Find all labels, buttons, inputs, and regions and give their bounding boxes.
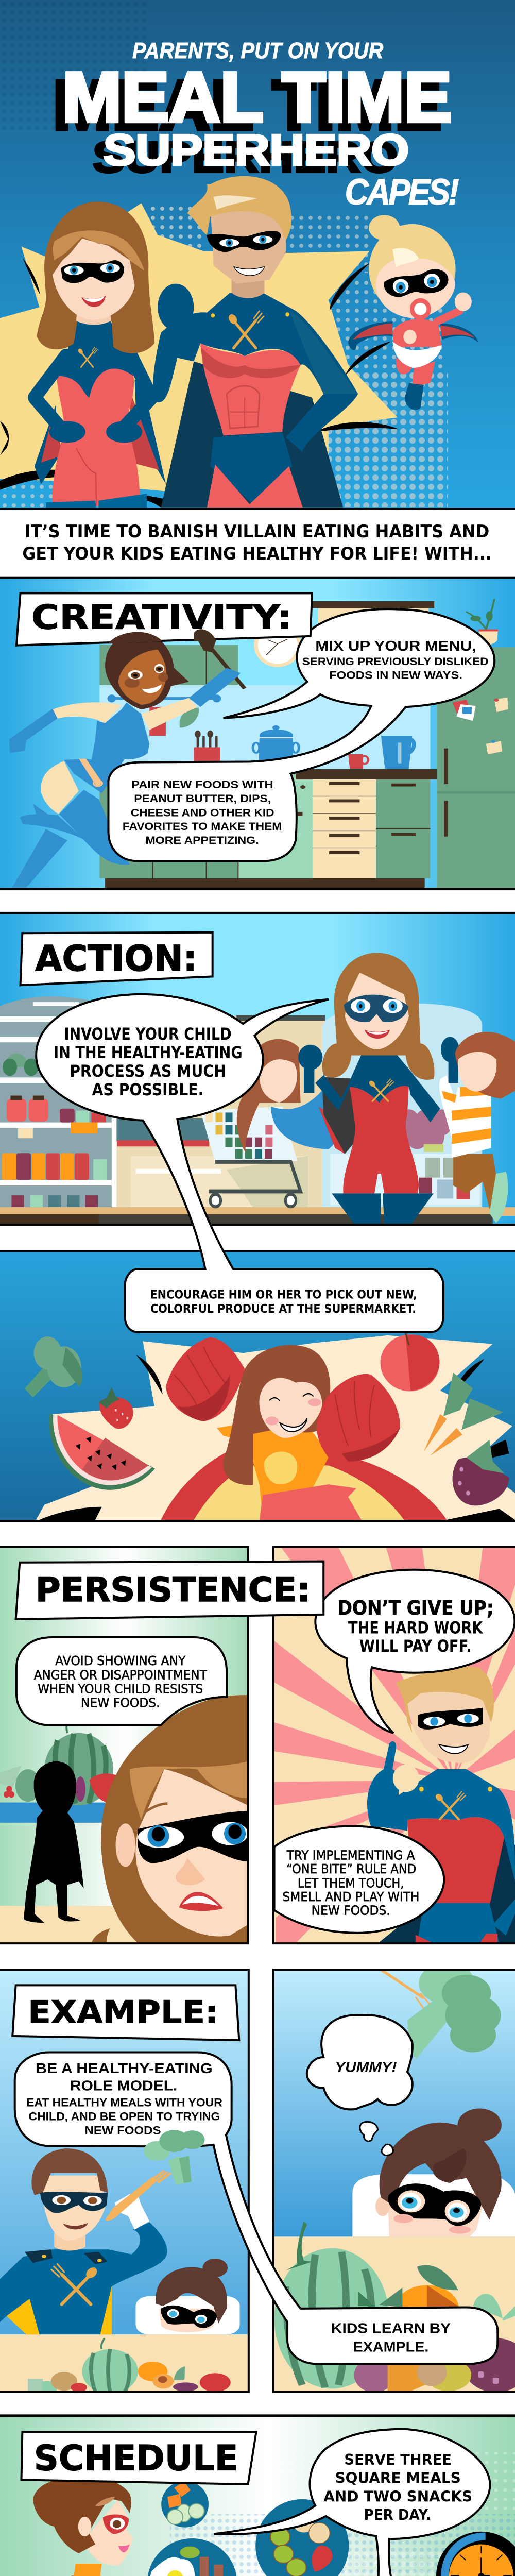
speech bubbles: role model and kids learn <box>15 2052 497 2364</box>
speech bubbles: CHEESE AND OTHER KID <box>131 806 274 819</box>
icon: watermelon slice <box>49 1413 155 1490</box>
character: boy <box>439 1032 515 1223</box>
character: schedule hero <box>0 2477 150 2576</box>
speech bubble: don't give up: WILL PAY OFF. <box>359 1637 472 1656</box>
speech bubble: avoid showing anger: WHEN YOUR CHILD RESISTS <box>38 1682 203 1697</box>
panel: schedule <box>0 2414 515 2576</box>
speech bubble: try one bite: LET THEM TOUCH, <box>298 1875 404 1891</box>
speech bubbles: PEANUT BUTTER, DIPS, <box>134 792 271 805</box>
panel: persistence <box>0 1547 515 1943</box>
speech bubbles: role model and kids learn: KIDS LEARN BY <box>331 2320 451 2336</box>
speech bubbles <box>214 2429 500 2576</box>
speech bubble: try one bite <box>274 1826 444 1933</box>
speech bubbles: MIX UP YOUR MENU, <box>315 638 476 654</box>
speech bubble: avoid showing anger <box>16 1637 227 1725</box>
heading: action <box>21 933 213 985</box>
plate: cucumber and cheese <box>161 2481 209 2528</box>
intro text: IT’S TIME TO BANISH VILLAIN EATING HABITS AND <box>25 521 489 542</box>
speech bubbles: SERVE THREE <box>344 2451 452 2468</box>
speech bubbles: role model and kids learn: BE A HEALTHY-EATING <box>36 2060 213 2076</box>
title <box>53 38 459 212</box>
comic burst <box>36 1335 515 1520</box>
speech bubbles: INVOLVE YOUR CHILD <box>64 1025 232 1043</box>
character: father with fork <box>0 2148 171 2334</box>
character: frustrated mother <box>92 1695 248 1943</box>
icon: broccoli <box>25 1336 82 1398</box>
speech bubbles: MORE APPETIZING. <box>146 834 259 846</box>
speech bubble: try one bite: SMELL AND PLAY WITH <box>283 1889 419 1904</box>
speech bubble: try one bite: “ONE BITE” RULE AND <box>286 1861 416 1876</box>
thought cloud: yummy <box>307 2015 413 2155</box>
icon: fruit on table <box>28 2338 231 2394</box>
speech bubbles: FOODS IN NEW WAYS. <box>329 669 462 681</box>
heading: example: EXAMPLE: <box>28 1994 218 2030</box>
plate: kiwi and strawberry <box>255 2499 349 2576</box>
character: girl with red fists <box>161 1337 447 1520</box>
intro text: GET YOUR KIDS EATING HEALTHY FOR LIFE! WITH... <box>22 544 492 564</box>
heading: creativity: CREATIVITY: <box>31 598 293 637</box>
character: kitchen hero <box>9 629 245 888</box>
supermarket shelves <box>0 996 117 1207</box>
speech bubbles: IN THE HEALTHY-EATING <box>54 1043 243 1062</box>
panel: action lower <box>0 1251 515 1520</box>
character: mother in red <box>315 953 440 1225</box>
character: girl in cape <box>237 1039 345 1154</box>
speech bubble: avoid showing anger: AVOID SHOWING ANY <box>55 1653 186 1668</box>
speech bubble: try one bite: NEW FOODS. <box>312 1903 390 1918</box>
speech bubbles: SQUARE MEALS <box>335 2470 461 2487</box>
speech bubbles: AS POSSIBLE. <box>92 1080 203 1099</box>
panel: example left <box>0 1970 249 2394</box>
icon: fridge notes <box>453 698 508 754</box>
speech bubbles: FAVORITES TO MAKE THEM <box>123 820 282 833</box>
speech bubbles: role model and kids learn: NEW FOODS <box>85 2125 161 2137</box>
heading: action: ACTION: <box>35 938 197 979</box>
speech bubbles: PAIR NEW FOODS WITH <box>131 778 273 791</box>
silhouette: child <box>24 1761 84 1923</box>
icon: pot <box>253 725 299 761</box>
speech bubbles: AND TWO SNACKS <box>323 2488 472 2505</box>
speech bubbles: role model and kids learn: ROLE MODEL. <box>70 2077 177 2094</box>
panel: example right <box>273 1962 515 2393</box>
character: daughter close-up <box>352 2109 515 2236</box>
speech bubbles: COLORFUL PRODUCE AT THE SUPERMARKET. <box>150 1301 416 1316</box>
icon: broccoli over bubble <box>144 2130 204 2185</box>
panel: action <box>0 912 515 1520</box>
panel: hero <box>0 0 515 510</box>
intro text <box>22 521 492 564</box>
thought cloud: yummy: YUMMY! <box>335 2059 397 2075</box>
character: mother <box>35 201 166 509</box>
speech bubble: don't give up: THE HARD WORK <box>348 1618 484 1638</box>
heading: schedule: SCHEDULE <box>34 2437 238 2478</box>
heading: creativity <box>16 593 312 646</box>
panel: creativity <box>0 577 515 890</box>
speech bubbles: role model and kids learn: EXAMPLE. <box>353 2338 428 2355</box>
panel: example <box>0 1962 515 2394</box>
icon: vegetables on table <box>274 2221 515 2393</box>
speech bubbles <box>108 609 494 861</box>
icon: strawberry <box>98 1387 133 1429</box>
speech bubbles: role model and kids learn: CHILD, AND BE OPEN TO TRYING <box>28 2111 220 2123</box>
speech bubble: avoid showing anger: ANGER OR DISAPPOINTMENT <box>34 1667 207 1683</box>
icon: fork and broccoli <box>381 1962 501 2060</box>
character: father pointing <box>367 1667 515 1943</box>
comic burst <box>0 203 399 508</box>
icon: carrots <box>424 1373 503 1455</box>
title: PARENTS, PUT ON YOUR <box>132 38 383 63</box>
title: SUPERHERO <box>104 126 409 175</box>
speech bubbles: ENCOURAGE HIM OR HER TO PICK OUT NEW, <box>150 1287 417 1301</box>
speech bubbles: PROCESS AS MUCH <box>70 1061 226 1080</box>
icon: watermelon and produce <box>0 1720 120 1805</box>
kitchen background <box>99 601 515 888</box>
icon: cup and kettle <box>348 736 414 769</box>
heading: persistence: PERSISTENCE: <box>36 1570 311 1609</box>
panel: persistence right <box>273 1547 515 1943</box>
speech bubbles: PER DAY. <box>364 2507 431 2524</box>
speech bubble: try one bite: TRY IMPLEMENTING A <box>286 1848 415 1863</box>
panel: persistence left <box>0 1547 248 1943</box>
heading: example <box>12 1985 239 2040</box>
icon: apple <box>381 1333 439 1392</box>
character: father <box>153 176 358 508</box>
character: small daughter <box>135 2259 240 2334</box>
title: MEAL TIME <box>62 58 452 137</box>
speech bubble: don't give up: DON’T GIVE UP; <box>338 1596 494 1619</box>
icon: utensil crock <box>194 731 220 761</box>
icon: shopping cart <box>200 1107 301 1207</box>
title: MEAL TIME <box>53 66 442 144</box>
title: SUPERHERO <box>93 133 398 182</box>
speech bubble: don't give up <box>315 1570 514 1733</box>
icon: clock <box>436 2532 515 2576</box>
plate: egg and bacon <box>147 2538 237 2576</box>
icon: plant <box>466 599 498 645</box>
icon: blackberry <box>452 1440 509 1505</box>
speech bubbles: role model and kids learn: EAT HEALTHY MEALS WITH YOUR <box>26 2097 222 2109</box>
title: CAPES! <box>345 172 459 212</box>
character: baby <box>348 215 478 410</box>
store counter and fridge <box>0 1003 515 1225</box>
heading: persistence <box>16 1562 323 1619</box>
speech bubble: avoid showing anger: NEW FOODS. <box>81 1695 160 1710</box>
speech bubbles <box>36 994 443 1332</box>
